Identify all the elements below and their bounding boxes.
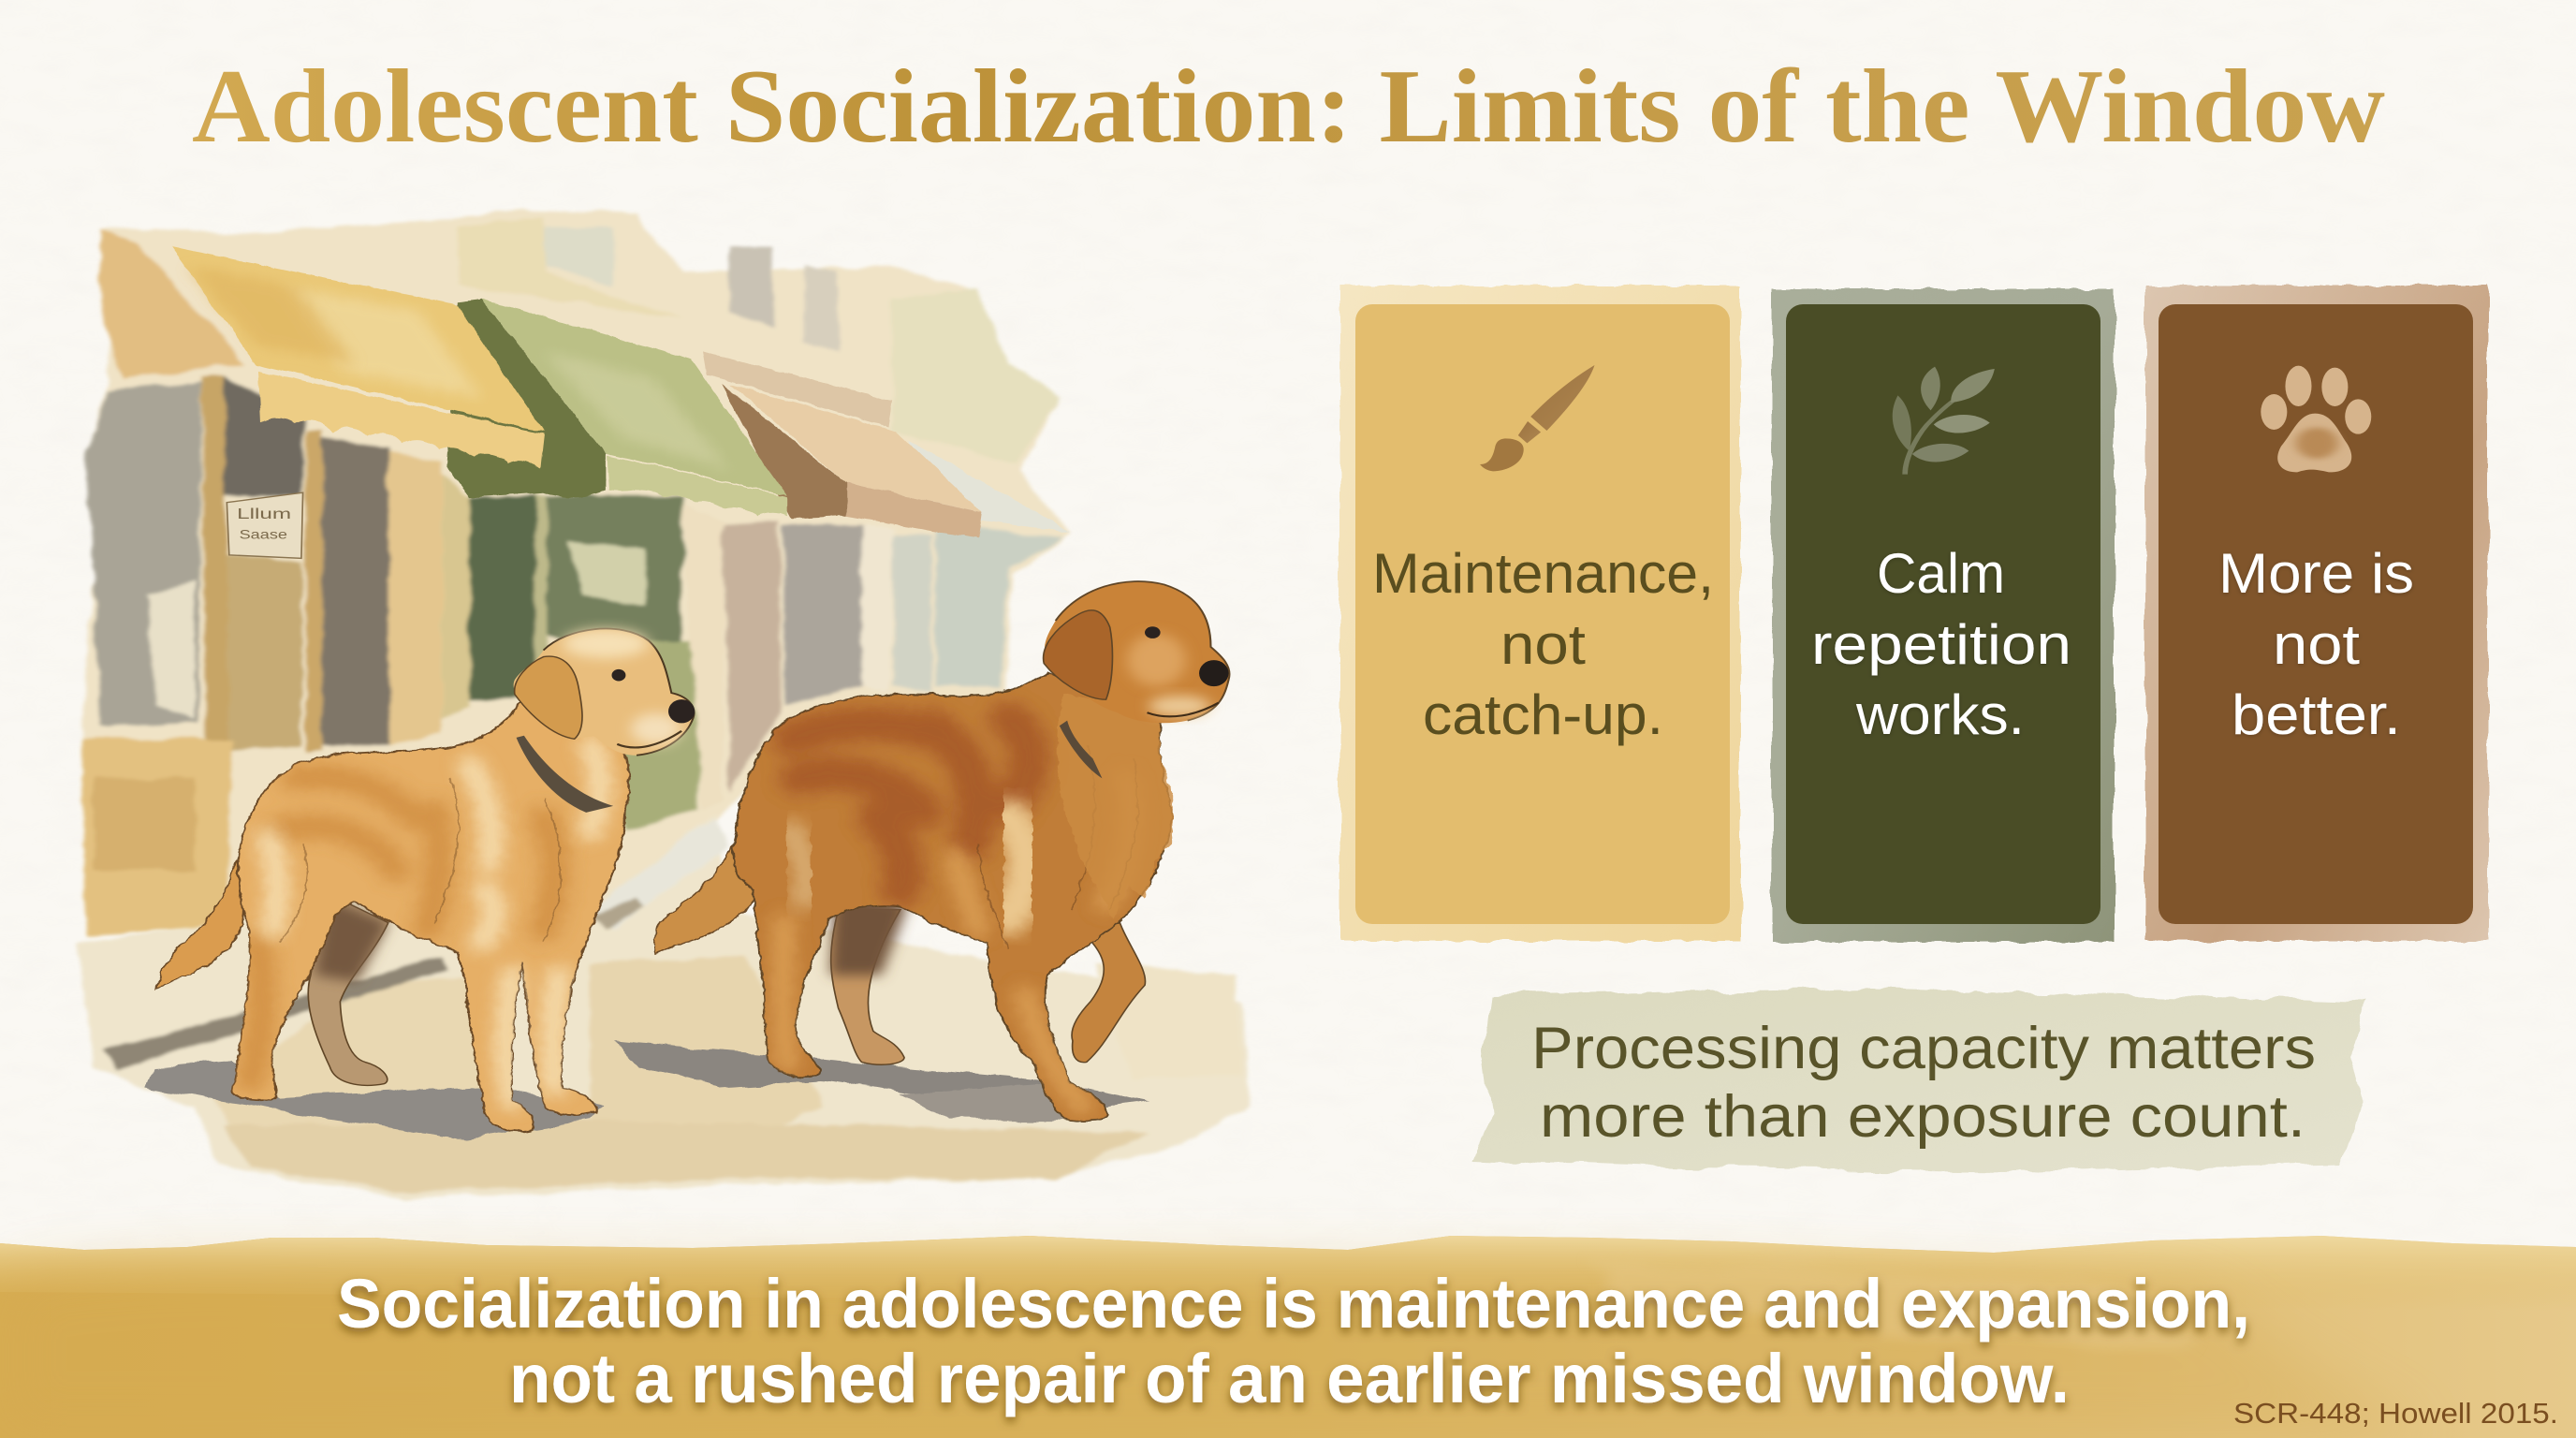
green awning	[446, 299, 788, 516]
collar	[1060, 721, 1102, 778]
face	[1145, 626, 1229, 716]
callout wash	[1471, 989, 2368, 1172]
tail	[654, 844, 757, 954]
card text: catch-up.	[1423, 683, 1663, 746]
card wash border	[1772, 289, 2115, 942]
body with coat washes	[233, 693, 629, 1131]
card text: better.	[2232, 683, 2401, 746]
panel: Calm repetition card	[1772, 289, 2115, 942]
icon: shop sign: Lllum	[237, 506, 291, 522]
icon: shop sign: Saase	[240, 527, 287, 542]
yellow awning	[171, 246, 544, 468]
pavement washes	[78, 811, 1250, 1198]
banner text: Socialization in adolescence is maintenance and expansion,	[337, 1265, 2250, 1343]
card text	[2218, 542, 2414, 746]
head	[1045, 581, 1229, 723]
brown awning	[703, 351, 982, 538]
banner wash	[0, 1236, 2576, 1438]
tail	[157, 851, 243, 989]
far hind leg	[831, 910, 904, 1064]
banner text	[337, 1265, 2250, 1417]
illustration: two golden retrievers on a shopfront street	[78, 211, 1250, 1198]
body with coat washes	[733, 673, 1172, 1121]
card text	[1811, 542, 2071, 746]
raised front leg	[1072, 917, 1145, 1063]
dark underbelly	[830, 890, 908, 976]
card fill	[2159, 304, 2473, 924]
ear	[515, 656, 582, 739]
card wash border	[2145, 286, 2488, 941]
card fill	[1786, 304, 2100, 924]
large golden retriever	[654, 581, 1229, 1121]
card text: Maintenance,	[1372, 542, 1714, 605]
street background with shopfronts and awnings	[78, 211, 1250, 1198]
card text	[1372, 542, 1714, 746]
banner: takeaway	[0, 1236, 2576, 1438]
collar	[517, 736, 613, 813]
icon: paint brush	[1480, 365, 1595, 471]
head	[514, 629, 694, 756]
far hind leg	[308, 897, 388, 1085]
card text: works.	[1855, 683, 2025, 746]
small golden retriever	[157, 629, 695, 1131]
citation: SCR-448; Howell 2015.	[2233, 1397, 2558, 1430]
title: Adolescent Socialization: Limits of the Window	[192, 49, 2385, 165]
icon: leaf sprig	[1893, 367, 1995, 475]
banner text: not a rushed repair of an earlier missed window.	[509, 1340, 2070, 1417]
card text: Calm	[1877, 542, 2005, 605]
callout text: Processing capacity matters	[1531, 1016, 2316, 1081]
ground shadows	[148, 1041, 1149, 1139]
ear	[1044, 610, 1112, 699]
face	[612, 669, 695, 747]
card wash border	[1339, 286, 1740, 941]
card text: not	[2273, 613, 2360, 676]
card text: repetition	[1811, 613, 2071, 676]
card text: not	[1500, 613, 1586, 676]
callout text: more than exposure count.	[1540, 1084, 2305, 1150]
chest mane	[1058, 693, 1174, 919]
icon: shop sign	[227, 492, 303, 558]
panel: More is not better card	[2145, 286, 2488, 941]
pale fourth awning	[908, 440, 1071, 532]
callout text	[1531, 1016, 2316, 1150]
dark underbelly	[315, 897, 388, 982]
panel: Maintenance card	[1339, 286, 1740, 941]
card text: More is	[2218, 542, 2414, 605]
card fill	[1355, 304, 1730, 924]
callout: processing capacity	[1471, 989, 2368, 1172]
icon: paw print	[2261, 366, 2371, 472]
